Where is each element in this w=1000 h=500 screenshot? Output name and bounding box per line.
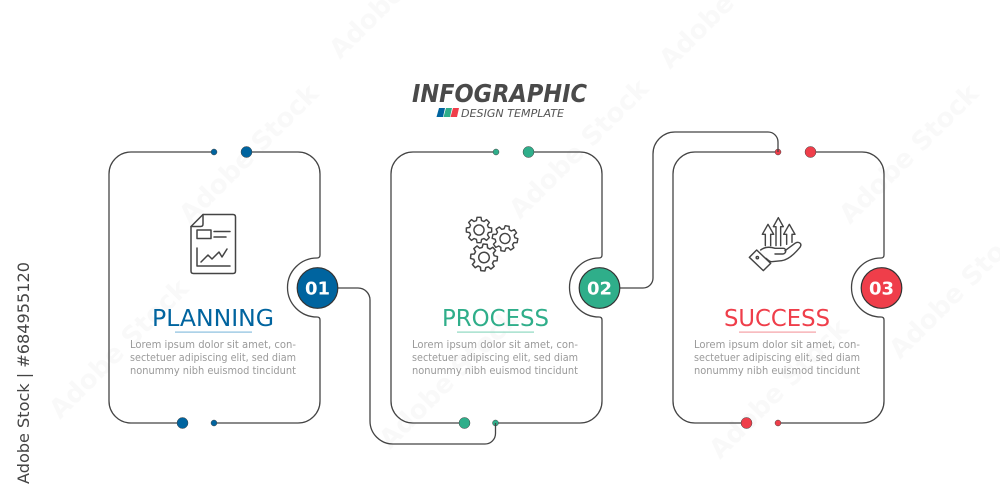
badge 01: 01 — [305, 278, 330, 300]
panel: planning — [109, 146, 320, 428]
panel: process — [391, 146, 602, 428]
subtitle text: DESIGN TEMPLATE — [461, 107, 564, 120]
heading underline — [739, 332, 816, 333]
background watermark: Adobe Stock — [704, 313, 855, 465]
background watermark: Adobe Stock — [44, 273, 195, 425]
panel: success — [673, 146, 884, 428]
body text: nonummy nibh euismod tincidunt — [694, 365, 860, 377]
title text: INFOGRAPHIC — [412, 79, 587, 108]
connector dots — [177, 146, 252, 428]
badge 02: 02 — [587, 278, 612, 300]
body text: Lorem ipsum dolor sit amet, con- — [694, 339, 860, 351]
heading underline — [175, 332, 252, 333]
subtitle stripes — [436, 108, 459, 117]
title — [412, 79, 587, 120]
card outline — [391, 152, 602, 423]
background watermark: Adobe Stock — [504, 73, 655, 225]
heading: PLANNING — [152, 304, 274, 332]
body text: Lorem ipsum dolor sit amet, con- — [130, 339, 296, 351]
connector dots — [459, 146, 534, 428]
body text: nonummy nibh euismod tincidunt — [412, 365, 578, 377]
background watermark: Adobe Stock — [174, 78, 325, 230]
body text — [412, 339, 578, 377]
body text: nonummy nibh euismod tincidunt — [130, 365, 296, 377]
card outline — [109, 152, 320, 423]
icon: hand with arrows — [749, 218, 801, 271]
body text: Lorem ipsum dolor sit amet, con- — [412, 339, 578, 351]
card outline — [673, 152, 884, 423]
background watermark: Adobe Stock — [834, 78, 985, 230]
icon: gears — [466, 217, 520, 272]
arrow: connector from 01 to process — [338, 288, 496, 444]
body text: sectetuer adipiscing elit, sed diam — [412, 352, 578, 364]
badge 03: 03 — [869, 278, 894, 300]
connector dots — [741, 146, 816, 428]
heading: SUCCESS — [724, 304, 830, 332]
badge 02 — [579, 268, 620, 308]
arrow: connector from 02 to success — [620, 132, 778, 288]
background watermark: Adobe Stock — [374, 303, 525, 455]
heading underline — [457, 332, 534, 333]
stock credit: Adobe Stock | #684955120 — [14, 262, 33, 484]
body text — [694, 339, 860, 377]
icon: document with chart — [191, 214, 236, 274]
body text — [130, 339, 296, 377]
heading: PROCESS — [442, 304, 549, 332]
badge 01 — [297, 268, 338, 308]
body text: sectetuer adipiscing elit, sed diam — [694, 352, 860, 364]
badge 03 — [861, 268, 902, 308]
body text: sectetuer adipiscing elit, sed diam — [130, 352, 296, 364]
